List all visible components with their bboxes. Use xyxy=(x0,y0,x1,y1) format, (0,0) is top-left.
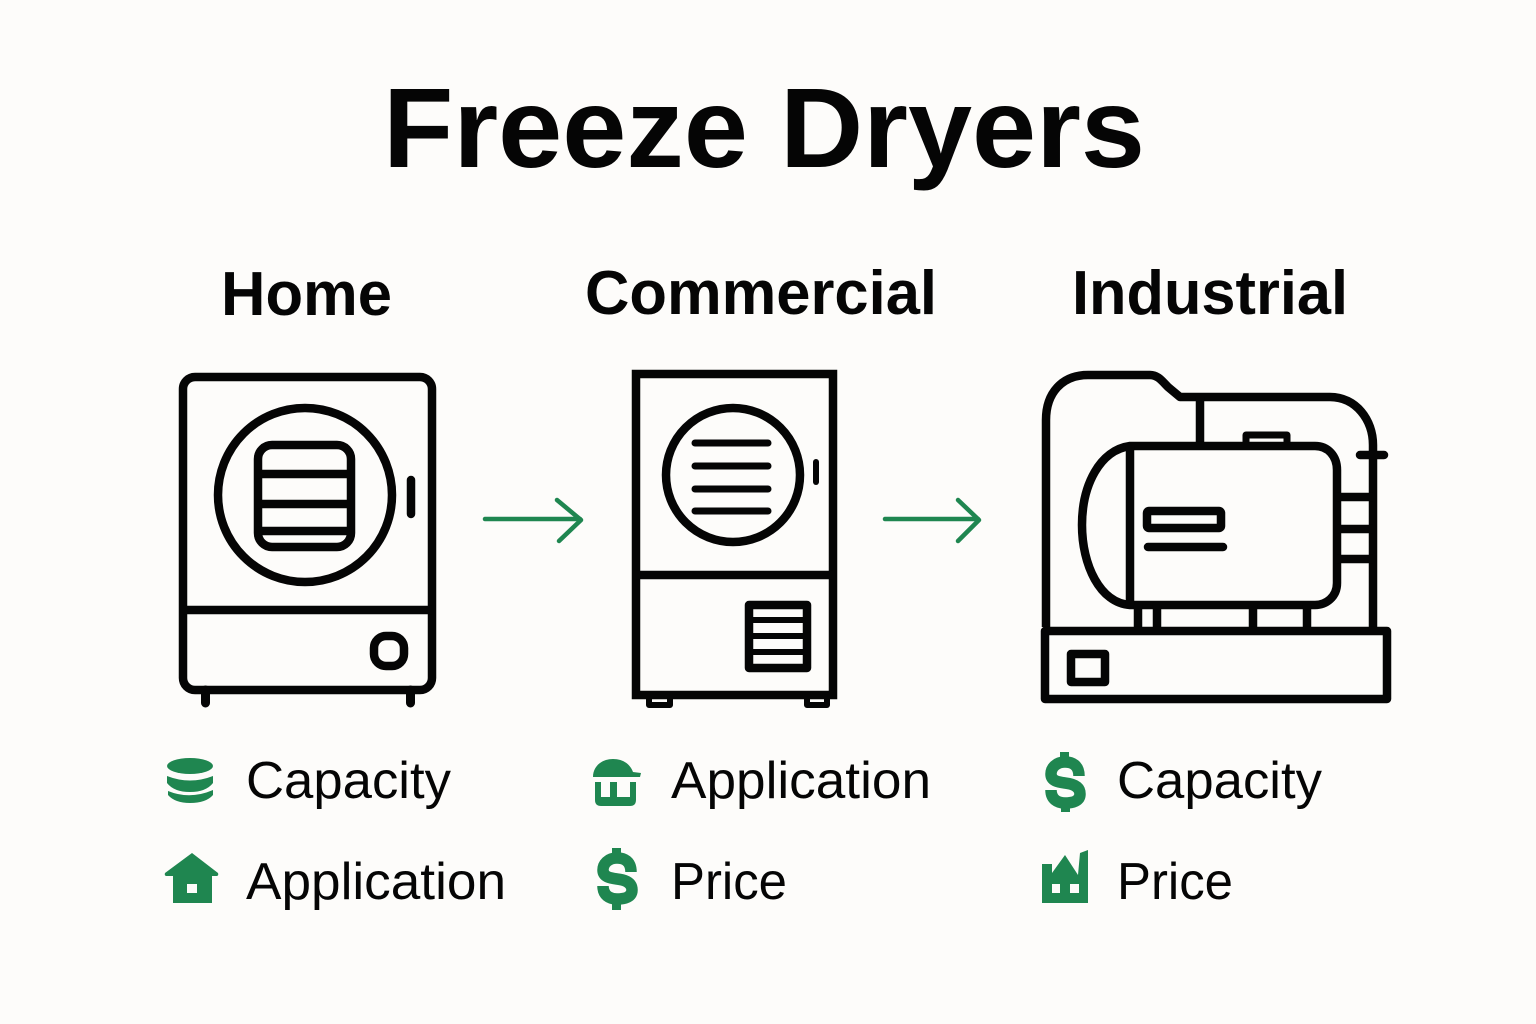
heading: Home: Home xyxy=(221,260,392,329)
heading: Industrial: Industrial xyxy=(1072,259,1348,328)
label: Price (industrial): Price xyxy=(1117,853,1233,911)
heading: Commercial: Commercial xyxy=(585,259,937,328)
label: Capacity (home): Capacity xyxy=(246,752,451,810)
label: Price (commercial): Price xyxy=(671,853,787,911)
icon: dollar sign (industrial) xyxy=(1051,752,1080,812)
icon: commercial freeze dryer xyxy=(636,374,833,705)
icon: home freeze dryer xyxy=(183,377,432,703)
arrow: commercial to industrial xyxy=(885,500,979,541)
title: Freeze Dryers xyxy=(383,65,1145,191)
icon: industrial freeze dryer xyxy=(1045,375,1387,699)
icon: capacity coins xyxy=(167,758,213,803)
arrow: home to commercial xyxy=(485,500,581,541)
icon: factory xyxy=(1042,850,1088,903)
label: Application (home): Application xyxy=(246,853,506,911)
icon: application store xyxy=(593,759,641,806)
label: Application (commercial): Application xyxy=(671,752,931,810)
icon: dollar sign (commercial) xyxy=(603,848,632,910)
label: Capacity (industrial): Capacity xyxy=(1117,752,1322,810)
icon: house xyxy=(165,853,218,903)
